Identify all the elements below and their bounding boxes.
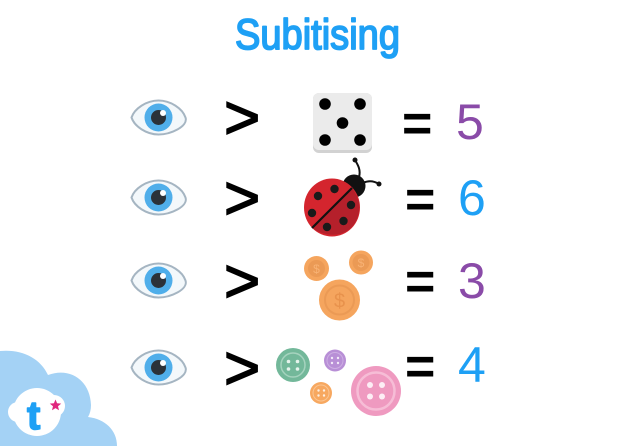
greater-than arrow: >: [224, 164, 260, 233]
logo cloud: [0, 351, 117, 446]
equals sign: =: [405, 338, 435, 396]
title: Subitising: [235, 11, 400, 59]
icon: three coins: $: [358, 256, 365, 270]
icon: four buttons: [276, 348, 401, 416]
number 5: 5: [456, 94, 484, 150]
number 6: 6: [458, 170, 486, 226]
icon: eye: [132, 264, 186, 298]
number 3: 3: [458, 253, 486, 309]
white logo cloud: [8, 388, 65, 436]
icon: eye: [132, 350, 186, 384]
logo letter t: t: [27, 394, 40, 438]
greater-than arrow: >: [224, 247, 260, 316]
icon: three coins: $: [313, 262, 320, 276]
row 2: ladybird equals 6: [132, 158, 486, 236]
icon: eye: [132, 100, 186, 134]
equals sign: =: [405, 171, 435, 229]
row 3: coins equals 3: [132, 247, 486, 320]
icon: three coins: [304, 250, 373, 320]
icon: three coins: $: [334, 290, 345, 312]
row 4: buttons equals 4: [132, 334, 486, 416]
icon: ladybird: [304, 158, 382, 236]
icon: pink star: [50, 400, 61, 410]
equals sign: =: [405, 253, 435, 311]
icon: dice with five spots: [313, 93, 372, 153]
icon: eye: [132, 180, 186, 214]
equals sign: =: [402, 95, 432, 153]
row 1: dice equals 5: [132, 84, 484, 153]
number 4: 4: [458, 337, 486, 393]
greater-than arrow: >: [224, 334, 260, 403]
greater-than arrow: >: [224, 84, 260, 152]
background cloud: [0, 351, 117, 446]
